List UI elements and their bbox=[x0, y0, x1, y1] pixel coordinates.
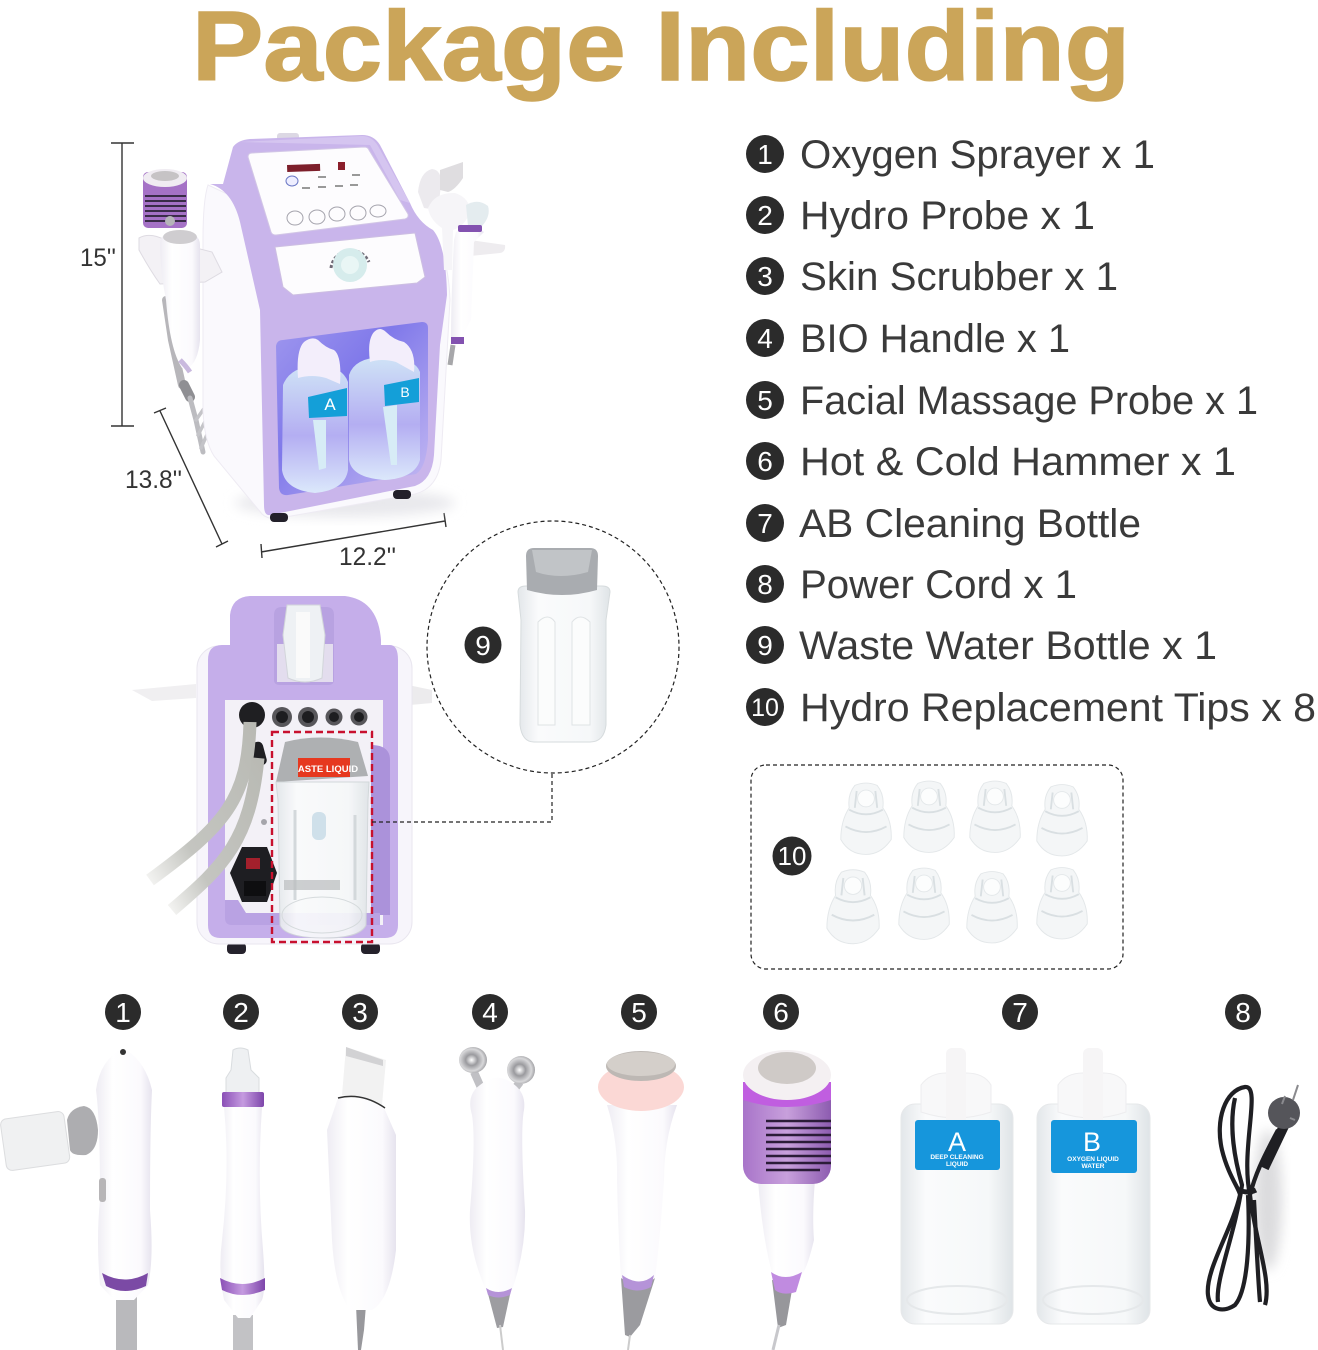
package contents list bbox=[746, 133, 1316, 730]
list item 10: Hydro Replacement Tips x 8 bbox=[800, 686, 1316, 730]
bottle B: WATER bbox=[1082, 1163, 1105, 1170]
bottle A: A bbox=[324, 395, 336, 414]
dial panel bbox=[275, 233, 425, 295]
icon: replacement tips bbox=[827, 781, 1087, 944]
white side shell bbox=[203, 185, 450, 518]
accessory 1: oxygen sprayer bbox=[0, 1048, 152, 1350]
list item 9: Waste Water Bottle x 1 bbox=[799, 624, 1217, 668]
side rails bbox=[132, 684, 196, 701]
list item 1: 1 bbox=[757, 139, 773, 170]
machine back view bbox=[132, 596, 432, 954]
list item 5: 5 bbox=[757, 385, 773, 416]
red dashed highlight bbox=[272, 732, 372, 942]
list item 10: 10 bbox=[751, 694, 779, 722]
probe recess bbox=[274, 605, 334, 685]
left accessory handles bbox=[139, 169, 222, 372]
feet bbox=[270, 490, 411, 522]
dimension lines and labels: 13.8'' bbox=[125, 466, 182, 494]
list item 6: 6 bbox=[757, 446, 773, 477]
control panel bbox=[248, 147, 408, 235]
callout: waste water bottle bbox=[427, 521, 679, 773]
accessory number badges: 2 bbox=[233, 997, 249, 1028]
machine front view bbox=[139, 133, 505, 522]
callout: waste water bottle: 9 bbox=[475, 630, 491, 661]
accessory number badges bbox=[105, 994, 1261, 1030]
list item 6: Hot & Cold Hammer x 1 bbox=[800, 440, 1236, 484]
accessory number badges: 6 bbox=[773, 997, 789, 1028]
waste bottle installed: ASTE LIQUID bbox=[298, 764, 358, 775]
bottle B: B bbox=[1083, 1127, 1101, 1157]
list item 7: AB Cleaning Bottle bbox=[799, 502, 1141, 546]
tips panel bbox=[751, 765, 1123, 969]
dimension lines and labels bbox=[80, 143, 446, 571]
dimension lines and labels: 15'' bbox=[80, 244, 116, 272]
accessory number badges: 4 bbox=[482, 997, 498, 1028]
accessory 4: bio handle bbox=[459, 1047, 535, 1350]
accessory number badges: 3 bbox=[352, 997, 368, 1028]
accessory number badges: 1 bbox=[115, 997, 131, 1028]
waste bottle installed bbox=[276, 738, 369, 938]
bottle B: OXYGEN LIQUID bbox=[1067, 1156, 1119, 1163]
accessory number badges: 7 bbox=[1012, 997, 1028, 1028]
list item 1: Oxygen Sprayer x 1 bbox=[800, 133, 1155, 177]
dashed leader line bbox=[372, 772, 552, 822]
accessory number badges: 8 bbox=[1235, 997, 1251, 1028]
dimension lines and labels: 12.2'' bbox=[339, 543, 396, 571]
accessory 5: facial massage probe bbox=[598, 1051, 684, 1350]
bottle A: LIQUID bbox=[946, 1161, 968, 1168]
accessory 7: cleaning bottles bbox=[901, 1048, 1150, 1324]
list item 2: 2 bbox=[757, 200, 773, 231]
bottle B bbox=[349, 329, 420, 480]
list item 2: Hydro Probe x 1 bbox=[800, 194, 1095, 238]
bottle A bbox=[282, 338, 348, 493]
bottle A: DEEP CLEANING bbox=[930, 1154, 984, 1161]
left cables bbox=[166, 300, 210, 452]
list item 8: 8 bbox=[757, 569, 773, 600]
hoses bbox=[150, 722, 258, 910]
connector panel bbox=[225, 700, 390, 925]
accessory number badges: 5 bbox=[631, 997, 647, 1028]
bottle B bbox=[1037, 1048, 1150, 1324]
bottle window bbox=[276, 322, 428, 495]
purple back shell bbox=[208, 596, 398, 938]
bottle A: A bbox=[948, 1127, 966, 1157]
list item 9: 9 bbox=[757, 630, 773, 661]
bottle A bbox=[901, 1048, 1013, 1324]
accessory 2: hydro probe bbox=[220, 1048, 265, 1350]
list item 4: BIO Handle x 1 bbox=[800, 317, 1070, 361]
accessory 3: skin scrubber bbox=[327, 1047, 396, 1350]
list item 5: Facial Massage Probe x 1 bbox=[800, 379, 1258, 423]
list item 3: Skin Scrubber x 1 bbox=[800, 255, 1118, 299]
list item 7: 7 bbox=[757, 508, 773, 539]
purple front shell bbox=[210, 135, 447, 515]
icon: waste bottle bbox=[518, 548, 610, 742]
tips panel: 10 bbox=[778, 841, 806, 871]
list item 8: Power Cord x 1 bbox=[800, 563, 1077, 607]
bottle B: B bbox=[400, 384, 410, 400]
list item 4: 4 bbox=[757, 323, 773, 354]
accessory 8: power cord bbox=[1208, 1085, 1300, 1309]
accessory 6: hot and cold hammer bbox=[743, 1050, 831, 1350]
right accessory handles bbox=[418, 162, 505, 365]
list item 3: 3 bbox=[757, 261, 773, 292]
power socket bbox=[230, 847, 277, 902]
